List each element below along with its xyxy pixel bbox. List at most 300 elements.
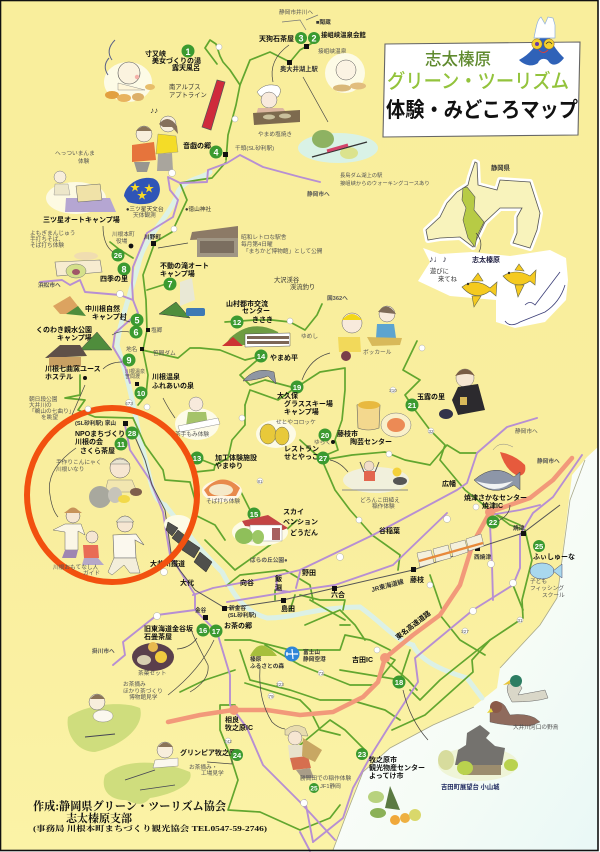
text: soba making: そば打ち体験 [206, 497, 240, 505]
icon: green tent [80, 332, 112, 350]
marker 22: 22 [489, 518, 497, 527]
marker 21 [406, 398, 418, 412]
illustration: youth hostel [45, 345, 87, 367]
text: rice planting at Katsumata: JF1静岡 [320, 782, 341, 790]
marker 13 [190, 452, 204, 464]
text: hettsui experience: へっついまんま [55, 150, 95, 157]
illustration: retro station [190, 226, 238, 257]
text: mugwort bun: よもぎまんじゅう [30, 229, 76, 237]
illustration: bathing baby [325, 53, 366, 93]
arrows: to markers 16 and 17 [168, 632, 214, 695]
text: Sky Pension Dodan: ペンション [283, 518, 318, 526]
text: Okubo grass ski: 大久保 [277, 391, 298, 400]
station: Nishi Yaizu [474, 546, 491, 561]
text: Yaitsuba: 谷稲葉 [379, 526, 400, 535]
text: Tengu tea house: 天狗石茶屋 [259, 34, 294, 43]
highlighted region [462, 187, 484, 247]
text: crafts: ゆめし [301, 333, 318, 340]
route badges: 210 [389, 388, 397, 393]
station: Okuoi Kojo [280, 60, 318, 73]
marker 2 [308, 32, 320, 44]
station: Nishi Yaizu: 西焼津 [474, 553, 491, 561]
icon: red Abt train [202, 80, 225, 130]
text: Kanaya stations: 金谷 [195, 606, 207, 614]
marker 18: 18 [395, 678, 403, 687]
text: tea factory note: 工場見学 [201, 769, 224, 777]
text: Fujieda pottery center: 藤枝市 [337, 429, 358, 438]
station: Okuoi Kojo: 奥大井湖上駅 [280, 64, 318, 73]
label: prefecture: 静岡県 [491, 163, 511, 172]
route badges: 227 [461, 629, 469, 634]
text: Mt Fuji Shizuoka airport: 静岡空港 [303, 655, 326, 663]
text: place names central: 大代 [180, 578, 194, 587]
text: Kawane onsen: 川根温泉 [152, 372, 180, 381]
text: Yuraku: ゆらく [314, 439, 331, 446]
text: Kanaya stations: (SL砂利駅) [228, 611, 256, 619]
footer credit: 作成:静岡県グリーン・ツーリズム協会 [33, 799, 226, 813]
marker 13: 13 [193, 454, 201, 463]
text: Yaizu fish center: 焼津IC [482, 501, 503, 510]
text: come and play: 遊びに [430, 266, 449, 275]
text: Shiki no sato: 四季の里 [100, 274, 128, 283]
text: wild birds: 大井川河口の野鳥 [513, 723, 559, 731]
text: old Tokaido stone path [144, 624, 193, 641]
text: Asahi viewpoint [29, 376, 87, 421]
text: town hall [112, 230, 135, 248]
route badges: 79 [268, 694, 274, 699]
label: region pointer: 志太榛原 [472, 255, 500, 264]
text: Grinpia Makinohara: グリンピア牧之原 [180, 748, 236, 757]
text: Sagara Makinohara IC: 牧之原IC [225, 723, 253, 732]
illustration: tea rolling [175, 397, 220, 440]
marker 17 [210, 624, 222, 638]
station: Yaizu: 焼津 [513, 524, 525, 532]
marker 25 lower [309, 783, 319, 793]
station: Sasamado [125, 368, 145, 386]
text: Asahi viewpoint: 「鵜山の七曲り」 [29, 407, 74, 415]
text: tea set: 茶菓セット [138, 669, 166, 677]
station: Kawaneryo: 川野町 [144, 233, 161, 241]
illustration: lake station [298, 130, 378, 163]
text: to Kakegawa: 掛川市へ [92, 647, 115, 655]
text: rice planting [360, 496, 400, 510]
marker 3: 3 [298, 34, 304, 44]
illustration: tea set [132, 642, 174, 671]
text: hettsui experience: 体験 [78, 157, 90, 165]
text: Osawa valley fishing: 大沢渓谷 [274, 275, 300, 284]
arrow: NPO to guide [49, 448, 76, 517]
text: Fudo falls camp: キャンプ場 [160, 269, 195, 278]
title: experience map: 体験・みどころマップ [386, 99, 578, 122]
roads: purple national routes [40, 155, 582, 851]
marker 12 [230, 316, 244, 328]
text: to route 362: 国362へ [327, 295, 348, 302]
arrow: farmer to forest [260, 668, 285, 729]
text: place names central: 野田 [302, 569, 316, 577]
station: Senzu: 千頭(SL砂利駅) [235, 144, 274, 152]
text: restaurant Setoyakko: レストラン [284, 445, 319, 453]
text: place names central: 飯 [275, 574, 282, 583]
illustration: muddy rice planting [342, 461, 409, 493]
text: lake station note [340, 171, 430, 187]
arrow: tent to marker 6 [112, 331, 129, 335]
marker 19 [290, 380, 304, 394]
text: rose park: ばらの丘公園● [250, 556, 288, 564]
route badges: 242 [224, 739, 232, 744]
roads: green prefectural roads [65, 40, 532, 830]
text: kids fishing school: 子ども [530, 577, 547, 585]
text: lake station note: 長島ダム湖上の駅 [340, 171, 383, 179]
text: Fudo falls camp: 不動の滝オート [160, 261, 209, 270]
title: region name: 志太榛原 [425, 50, 491, 69]
marker 28 [126, 426, 138, 440]
text: come and play: 来てね [438, 275, 458, 283]
text: place names central: 向谷 [240, 578, 254, 587]
marker 19: 19 [293, 383, 301, 392]
route badges: 81 [257, 479, 263, 484]
text: Mitsuboshi auto camp: 三ツ星オートキャンプ場 [43, 215, 120, 224]
text: Nakakawane camp [85, 304, 127, 321]
text: old Tokaido stone path: 石畳茶屋 [144, 632, 172, 641]
station: Yaizu [513, 524, 526, 536]
marker 28: 28 [128, 429, 136, 438]
text: kids fishing school: スクール [542, 592, 565, 599]
station: Sasamado: 笹間渡 [125, 373, 140, 380]
text: Oigawa railway and stops [442, 427, 560, 488]
station: Sasamado: 川根温泉 [125, 368, 145, 375]
text: town hall: 役場 [116, 237, 128, 245]
text: Sky Pension Dodan: スカイ [283, 508, 304, 516]
illustration: Haibara forest: 榛原 [250, 655, 262, 663]
text: Sagara Makinohara IC: 相良 [225, 715, 239, 724]
text: NPO group: NPOまちづくり [75, 429, 125, 438]
highway: Tomei Expressway [168, 458, 572, 722]
route badges: 473 [125, 401, 133, 406]
text: Sky Pension Dodan [283, 508, 318, 537]
text: rice planting: どろんこ田植え [360, 496, 400, 504]
text: place names central: 島田 [281, 604, 295, 613]
marker 10: 10 [137, 389, 145, 398]
decorative wind swirl [505, 272, 565, 325]
text: Sumatakyo hot spring: 露天風呂 [172, 64, 200, 72]
illustration: kid on go-kart [338, 306, 402, 361]
text: restaurant Setoyakko [284, 445, 319, 461]
arrow: castle to marker 18 [403, 690, 428, 740]
stations: JR Tokaido [203, 567, 416, 620]
illustration: woman with tea [439, 369, 485, 419]
text: mountain village center: 山村都市交流 [226, 299, 268, 308]
illustration: yamame grill cook [253, 85, 300, 125]
highway: IC nodes [229, 507, 495, 715]
marker 25: 25 [535, 542, 544, 551]
marker 7: 7 [167, 280, 173, 290]
text: Koyama castle: 吉田町展望台 小山城 [441, 782, 500, 791]
marker 10 [134, 386, 148, 400]
marker 21: 21 [408, 401, 417, 410]
marker 25 lower: 25 [310, 786, 318, 792]
text: Mitsuboshi observatory [126, 205, 164, 219]
arrow: kart to marker 19 [302, 353, 330, 380]
text: Yamame daira: やまめ平 [270, 353, 298, 362]
illustration: orange circle highlight [27, 408, 197, 582]
station: Shiogo: 塩郷 [151, 326, 163, 334]
text: mountain village center: きさき [252, 315, 273, 324]
route badges [85, 44, 523, 806]
marker 15: 15 [250, 510, 259, 519]
marker 11: 11 [117, 440, 126, 449]
illustration: night sky with stars: ★ [137, 191, 147, 202]
icon: yellow fish pair [462, 264, 536, 307]
inset: Shizuoka prefecture map [426, 162, 540, 248]
marker 18 [392, 676, 406, 688]
text: Osawa valley fishing: 渓流釣り [290, 282, 315, 291]
marker 16 [196, 624, 210, 636]
illustration: hot spring girl [104, 40, 155, 102]
text: youth hostel: ホステル [45, 373, 73, 381]
arrow: station illustration to station [158, 243, 188, 248]
station: Kawaneryo [144, 233, 161, 246]
text: Mt Fuji Shizuoka airport [303, 648, 326, 663]
text: Sessokyo hot spring hall: 接岨峡温泉会館 [321, 30, 366, 39]
text: Yaizu fish center [464, 493, 527, 510]
station: Jina [126, 345, 144, 353]
text: konnyaku note: 手作りこんにゃく [56, 458, 102, 466]
marker 22 [486, 516, 500, 528]
footer credit [33, 799, 268, 833]
arrow: camp to marker 26 [103, 226, 113, 252]
text: Makinohara shop: 牧之原市 [369, 755, 397, 764]
marker 23: 23 [358, 750, 366, 759]
illustration: soba making [202, 479, 242, 502]
marker 16: 16 [199, 626, 207, 635]
text: to Hamamatsu: 浜松市へ [38, 281, 61, 289]
label: region pointer [472, 233, 500, 264]
text: Asahi viewpoint: を眺望 [41, 413, 58, 421]
marker 26 [112, 248, 124, 262]
marker 6: 6 [133, 328, 139, 338]
text: Sky Pension Dodan: どうだん [290, 528, 318, 537]
text: lake station note: 接岨峡からのウォーキングコースあり [340, 179, 430, 187]
text: Kanaya stations: 新金谷 [229, 604, 246, 612]
text: Mitsuboshi observatory: ●三ツ星天文台 [126, 205, 164, 213]
illustration: baby in tea field 2 [104, 742, 191, 804]
text: Okubo grass ski: キャンプ場 [284, 407, 319, 416]
illustration: fish [243, 370, 276, 384]
text: rice planting at Katsumata: 勝間田での稲作体験 [300, 774, 351, 782]
illustration: boy and girl with music [132, 106, 178, 172]
text: Mt Fuji Shizuoka airport: 富士山 [303, 648, 320, 656]
text: Oigawa railway and stops: 広幡 [442, 479, 456, 488]
marker 8 [118, 262, 130, 276]
text: Yoshida IC: 吉田IC [352, 655, 373, 664]
text: Asahi viewpoint: 大井川の [29, 401, 52, 409]
text: Tokuyama shrine: ●徳山神社 [185, 205, 211, 213]
text: place names central [180, 569, 424, 613]
arrow: rice planting to marker 27 [330, 460, 348, 472]
illustration: night sky with stars [124, 178, 160, 204]
text: Nakakawane camp: キャンプ村 [92, 312, 127, 321]
marker 12: 12 [233, 318, 241, 327]
marker 11 [114, 438, 128, 450]
marker 2: 2 [311, 34, 317, 44]
marker 25 [533, 540, 545, 552]
text: yamame grill: やまめ塩焼き [258, 130, 292, 138]
text: rice planting at Katsumata [300, 774, 351, 790]
text: rice planting: 稲作体験 [372, 502, 395, 510]
text: guide: ガイド [83, 569, 100, 577]
text: Sagara Makinohara IC [225, 715, 253, 732]
text: retro station note: 昭和レトロな駅舎 [241, 233, 287, 241]
arrow: camp to marker 5 [120, 319, 130, 322]
station: Senzu [223, 144, 274, 157]
text: Makinohara shop: よってけ市 [369, 771, 403, 780]
text: Sasama dam: 笹間ダム [153, 349, 176, 357]
text: Fujieda pottery center: 陶芸センター [350, 437, 392, 446]
station: Sessokyo onsen [304, 44, 347, 55]
illustration: log cabin [53, 296, 86, 316]
illustration: JR train [417, 534, 484, 567]
text: restaurant Setoyakko: せとやっこ [284, 452, 319, 461]
title: green tourism: グリーン・ツーリズム [387, 70, 569, 93]
marker 23 [356, 748, 368, 760]
arrow: viewpoint [72, 385, 85, 415]
text: Fishuna: ふぃしゅーな [533, 552, 575, 561]
marker 26: 26 [114, 251, 122, 260]
text: youth hostel [45, 364, 101, 381]
text: Kunowaki camp: くのわき親水公園 [36, 325, 92, 334]
illustration: night sky with stars: ★ [144, 184, 154, 195]
text: retro station note: 毎月第4日曜 [241, 240, 273, 248]
text: tea picking note: 博物館見学 [129, 693, 158, 701]
station: Jina: 地名 [126, 345, 138, 353]
text: guide: 川根おもてなし人 [53, 563, 99, 571]
text: tea picking note [123, 680, 163, 701]
marker 4: 4 [213, 148, 219, 158]
text: retro station note: 「まちかど博物館」として公開 [243, 247, 323, 255]
icon: mountain mascot [519, 17, 564, 65]
illustration: pottery [357, 401, 411, 437]
marker 9 [122, 354, 136, 366]
illustration: farmer with rice [285, 725, 322, 778]
text: tea picking note: ほかり茶づくり [123, 687, 163, 695]
text: NPO group: 川根の会 [75, 437, 103, 446]
text: Okubo grass ski [277, 391, 333, 416]
text: mountain village center [226, 299, 273, 324]
white cloud with fish [418, 248, 568, 328]
text: place names central: 六合 [331, 590, 345, 599]
text: Kunowaki camp: キャンプ場 [57, 333, 92, 342]
text: Makinohara shop: 観光物産センター [369, 763, 425, 772]
text: kids fishing school [530, 577, 565, 599]
text: Kawane onsen: ふれあいの泉 [152, 381, 194, 390]
text: Makinohara shop [369, 755, 425, 780]
illustration: boy and girl with music: ♪♪ [150, 106, 158, 115]
text: Mitsuboshi observatory: 天体観測 [133, 211, 156, 219]
marker 4 [210, 146, 222, 158]
marker 14 [254, 350, 268, 362]
text: tea factory note [189, 763, 224, 777]
text: old Tokaido stone path: 旧東海道金谷坂 [144, 624, 193, 633]
text: konnyaku note [56, 458, 102, 473]
arrow: cook to teahouse [272, 45, 289, 82]
text: retro station note [241, 233, 323, 255]
marker 5: 5 [134, 316, 140, 326]
arrow: fish center to marker 22 [498, 505, 510, 521]
text: Sumatakyo hot spring [145, 49, 201, 72]
illustration: blue fish [530, 563, 562, 579]
text: pocket kart: ボッカール [363, 348, 392, 356]
marker 20: 20 [321, 431, 329, 440]
text: Oigawa Railway: 大井川鐵道 [150, 559, 185, 568]
text: Otogi no sato: 音戯の郷 [183, 141, 211, 150]
illustration: steam train [164, 515, 212, 572]
text: Kawane onsen [152, 372, 194, 390]
text: mugwort bun [30, 229, 76, 249]
text: town hall: 川根本町 [112, 230, 135, 238]
text: Asahi viewpoint: 朝日段公園 [29, 395, 58, 403]
text: Fudo falls camp [160, 261, 209, 278]
text: Iyama station [75, 419, 128, 427]
text: Gyokuro no sato: 玉露の里 [417, 393, 445, 401]
illustration: shrimp and tuna [474, 444, 525, 490]
illustration: pension [232, 515, 288, 546]
text: Sumatakyo hot spring: 寸又峡 [145, 49, 166, 58]
text: Minami Alps Abt Line: 南アルプス [169, 82, 200, 91]
coast line [333, 460, 585, 850]
railway: Oigawa line [132, 430, 560, 608]
text: Okubo grass ski: グラススキー場 [284, 399, 333, 408]
illustration: Haibara forest [250, 645, 284, 670]
text: mountain village center: センター [242, 306, 270, 315]
marker 1: 1 [185, 47, 191, 57]
arrow: hostel to marker 9 [103, 362, 122, 369]
arrow: lake to station [303, 77, 328, 122]
marker 27: 27 [319, 454, 327, 463]
illustration: center building [222, 326, 290, 347]
illustration: falls and tent [159, 278, 205, 318]
text: tea rolling: 茶手もみ体験 [175, 430, 209, 438]
illustration: Haibara forest: ふるさとの森 [250, 662, 284, 670]
text: NPO group [75, 429, 125, 446]
text: kids fishing school: フィッシング [530, 584, 564, 592]
text: Nakakawane camp: 中川根自然 [85, 304, 120, 313]
illustration: wagashi and soba [55, 252, 102, 278]
marker 3 [295, 32, 307, 44]
text: hettsui experience [55, 150, 95, 165]
text: come and play: ♪♩♪ [429, 254, 447, 264]
marker 1 [182, 44, 194, 58]
illustration: ducks [487, 675, 548, 726]
arrow: tea rolling to onsen [163, 398, 175, 418]
station: Shiogo [146, 326, 163, 334]
marker 6 [130, 326, 142, 338]
route badges: 223 [276, 682, 284, 687]
marker 17: 17 [212, 627, 220, 636]
text: guide [53, 563, 100, 577]
route badges: 32 [428, 429, 434, 434]
marker 24: 24 [233, 751, 242, 760]
text: tea factory note: お茶摘み・ [189, 763, 217, 771]
text: mugwort bun: そば打ち体験 [30, 241, 64, 249]
text: Fujieda pottery center [337, 429, 392, 446]
marker 8: 8 [121, 264, 127, 274]
text: Minami Alps Abt Line: アプトライン [169, 91, 207, 99]
text: to Shizuoka: 静岡市へ [307, 190, 330, 198]
text: Oigawa railway and stops: 静岡市へ [515, 427, 538, 435]
text: to Ikawa: 静岡市井川へ [279, 8, 313, 16]
illustration: baby in tea field 1 [68, 694, 141, 752]
route badges: 73 [318, 671, 324, 676]
